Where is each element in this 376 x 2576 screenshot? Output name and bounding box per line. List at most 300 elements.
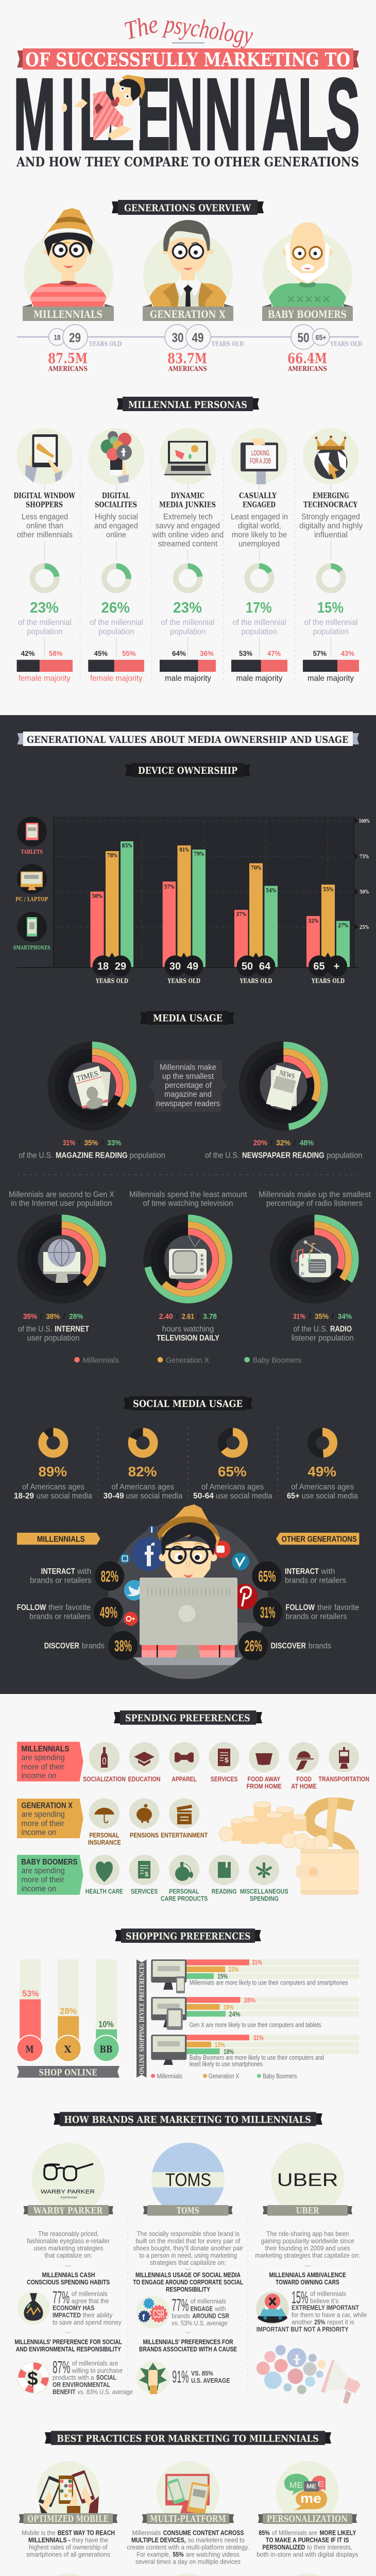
uber stat: car ownership: 25%	[314, 2318, 326, 2326]
icon: radio with notes	[296, 1241, 331, 1277]
television stat: 2.40	[159, 1313, 173, 1321]
persona titles: MEDIA JUNKIES	[159, 501, 216, 509]
baby boomer spending icons	[89, 1855, 279, 1885]
magazine stat: 35%	[84, 1139, 98, 1147]
chart: device ownership bars: 32%	[308, 918, 318, 924]
tag: millennials: MILLENNIALS	[37, 1535, 85, 1544]
magazine stat: /	[78, 1139, 80, 1147]
shop online ribbon: SHOP ONLINE	[39, 2067, 97, 2078]
population captions: population	[98, 628, 134, 636]
brand name ribbons: UBER	[296, 2206, 319, 2216]
heading ribbon: GENERATIONS OVERVIEW	[124, 202, 251, 214]
uber stat: car ownership: 15%	[292, 2288, 308, 2307]
tag: other generations	[276, 1533, 360, 1545]
section: millennial personas	[13, 397, 363, 683]
icon: takeout box	[255, 1753, 272, 1765]
newspaper stat: /	[294, 1139, 296, 1147]
icon: csr gears: f	[142, 2313, 145, 2322]
icon: blog speech bubble	[276, 2573, 339, 2576]
uber stat: car ownership: report it is	[327, 2318, 354, 2326]
section: how brands are marketing	[14, 2112, 367, 2404]
magazine stat: population	[129, 1151, 165, 1160]
social media percentages: 49%	[307, 1464, 336, 1480]
text: optimized mobile: highest rates of ownership of	[29, 2544, 108, 2551]
television stat: /	[176, 1313, 178, 1321]
uber stat: car ownership	[256, 2288, 367, 2333]
legend icon: tablets: TABLETS	[21, 849, 43, 855]
heading ribbon: SPENDING PREFERENCES	[125, 1713, 250, 1724]
warby parker stat: responsibility: of millennials are	[72, 2360, 118, 2367]
generation x spending labels: INSURANCE	[88, 1838, 121, 1846]
chart: shop online columns: 28%	[60, 2006, 77, 2016]
text: multi platform: several times a day on multiple devices	[135, 2558, 241, 2566]
device preference group: baby boomers: 31%	[253, 2034, 264, 2042]
age badges: +	[334, 961, 339, 972]
persona titles: CASUALLY	[239, 492, 277, 500]
chart: device ownership bars: 57%	[164, 884, 175, 890]
persona share donuts	[32, 566, 343, 590]
device preference legend: Generation X	[209, 2073, 240, 2080]
newspaper stat: NEWSPAPAER READING	[242, 1151, 324, 1160]
callout: smallest percentage: newspaper readers	[156, 1099, 220, 1108]
gender split bars: 42%	[21, 649, 35, 657]
millennial brand statements: their favorite	[48, 1603, 91, 1612]
icon: laptop with media	[160, 428, 216, 484]
chart: shop online columns: BB	[100, 2044, 112, 2055]
social media percentages	[38, 1464, 336, 1480]
vertical ribbon: online shopping device preferences: ONLINE SHOPPING DEVICE PREFERENCES	[138, 1963, 145, 2074]
heading ribbon	[114, 1710, 262, 1725]
chart: shop online columns: M	[26, 2044, 34, 2055]
heading ribbon: HOW BRANDS ARE MARKETING TO MILLENNIALS	[64, 2114, 311, 2126]
brand intros: that capitalize on:	[45, 2251, 92, 2259]
age timeline: 49	[192, 331, 204, 345]
section: best practices	[19, 2431, 358, 2576]
population captions: of the millennial	[233, 618, 286, 627]
warby parker stat: economy: of millennials	[72, 2290, 108, 2298]
magazine stat: MAGAZINE READING	[56, 1151, 128, 1160]
icon: book	[218, 1862, 231, 1878]
baby boomer spending labels: MISCELLANEOUS	[240, 1888, 288, 1895]
chart: device ownership bars: 54%	[266, 887, 276, 894]
baby boomer spending labels	[86, 1888, 288, 1903]
gender split bars: male majority	[165, 674, 211, 683]
social media captions: use social media	[216, 1492, 272, 1500]
tag: millennials spending: MILLENNIALS	[21, 1744, 70, 1753]
brand subheadings	[14, 2271, 346, 2353]
age timeline	[17, 325, 362, 349]
chart: device ownership bars	[17, 817, 370, 985]
best practice ribbons row one	[19, 2513, 357, 2524]
icon: television	[169, 1235, 207, 1279]
millennial spending labels	[83, 1775, 369, 1790]
text: multi platform: 55%	[173, 2551, 184, 2558]
other generations brand statements	[271, 1567, 360, 1650]
device preference group: millennials: 23%	[229, 1965, 239, 1973]
persona descriptions: Strongly engaged	[301, 513, 360, 521]
title script: The psychology: psychology	[162, 9, 255, 50]
icon: csr gears	[136, 2296, 169, 2329]
text: multi platform: MULTIPLE DEVICES,	[131, 2536, 186, 2544]
tag: generation x spending: are spending	[21, 1810, 65, 1819]
icon: money bag	[17, 2292, 50, 2325]
icon: heart	[96, 1861, 113, 1882]
uber stat: car ownership: IMPORTANT BUT NOT A PRIORITY	[257, 2326, 349, 2333]
gender split bars: male majority	[307, 674, 354, 683]
millennial brand statements: brands or retailers	[29, 1613, 91, 1621]
brand interaction badges: 82%	[101, 1567, 118, 1585]
brand intros	[27, 2230, 360, 2266]
subheading ribbon: device ownership	[125, 763, 250, 777]
device preference legend: Millennials	[157, 2073, 182, 2080]
warby parker stat: responsibility: willing to purchase	[72, 2367, 123, 2375]
chart: device ownership bars: 37%	[236, 911, 246, 918]
internet stat: /	[63, 1313, 65, 1321]
media usage legend: Baby Boomers	[253, 1356, 301, 1365]
portrait: generation x	[143, 220, 233, 320]
legend icon: pc laptop: PC / LAPTOP	[15, 896, 48, 903]
persona descriptions: savvy and engaged	[156, 521, 220, 531]
social media captions	[14, 1483, 358, 1500]
brand card: warby parker logo: WARBY PARKER	[41, 2189, 95, 2195]
chart: device ownership bars: 85%	[122, 842, 132, 849]
icon: raised fist	[136, 2361, 169, 2394]
brand interaction badges: 49%	[100, 1603, 117, 1621]
text: optimized mobile: they have the	[72, 2536, 108, 2544]
text: multi platform: are watching videos	[186, 2551, 240, 2558]
population captions: of the millennial	[304, 618, 357, 627]
warby parker stat: responsibility: 87%	[53, 2358, 70, 2377]
brand intros: The reasonably priced,	[38, 2230, 99, 2238]
warby parker stat: economy: ECONOMY HAS	[53, 2304, 95, 2312]
device preference group: generation x	[151, 1996, 359, 2030]
brand subheadings: TO ENGAGE AROUND CORPORATE SOCIAL	[133, 2278, 243, 2286]
population captions: of the millennial	[18, 618, 72, 627]
age timeline: 18	[54, 333, 61, 342]
brand intros: to a person in need, using marketing	[139, 2251, 237, 2259]
gender split bars: 43%	[341, 649, 355, 657]
brand intros: fashionable eyeglass e-retailer	[27, 2237, 110, 2245]
millennial spending labels: SERVICES	[211, 1775, 238, 1783]
age timeline: YEARS OLD	[89, 340, 122, 347]
persona titles: TECHNOCRACY	[303, 501, 358, 509]
television stat: 2.61	[182, 1313, 194, 1321]
text: personalization: 85%	[259, 2529, 270, 2537]
persona descriptions: influential	[314, 531, 348, 539]
text: multi platform	[127, 2529, 249, 2566]
illustration: millennial at laptop with social icons	[106, 1504, 270, 1681]
brand interaction badges: 31%	[260, 1603, 275, 1621]
text: optimized mobile: smartphones of all generations	[26, 2551, 111, 2558]
radio stat: 34%	[338, 1313, 352, 1321]
radial chart: newspaper readers	[239, 1042, 328, 1130]
newspaper stat	[205, 1139, 363, 1160]
persona percentages: 26%	[101, 600, 130, 616]
device preference legend: Baby Boomers	[263, 2073, 297, 2080]
magazine stat: 31%	[63, 1139, 75, 1147]
chart: device ownership bars: 75%	[360, 854, 369, 860]
warby parker stat: economy: IMPACTED	[53, 2311, 81, 2319]
text: personalization: PERSONALIZED	[262, 2544, 305, 2551]
brand card: toms logo: TOMS	[165, 2170, 211, 2190]
newspaper stat: of the U.S.	[205, 1151, 240, 1160]
heading ribbon	[115, 1928, 261, 1943]
warby parker stat: economy: to save and spend money	[53, 2318, 122, 2326]
gender split bars: 47%	[267, 649, 281, 657]
tag: millennials spending	[17, 1742, 83, 1782]
icon: life ring with dollar	[17, 2361, 50, 2394]
social media captions: 18-29	[14, 1492, 34, 1500]
gender split bars: female majority	[90, 674, 143, 683]
brand interaction badges: 38%	[114, 1637, 132, 1655]
tag: millennials spending: more of their	[21, 1762, 64, 1771]
text: personalization: MORE LIKELY	[320, 2529, 356, 2537]
icon: multi platform devices	[157, 2461, 219, 2524]
millennial brand statements: INTERACT	[41, 1567, 75, 1576]
persona titles: SOCIALITES	[95, 501, 137, 509]
icon: personalization speech bubbles: E	[317, 2480, 324, 2488]
magazine stat	[19, 1139, 165, 1160]
media usage legend	[74, 1356, 301, 1365]
age badges: 29	[115, 961, 126, 972]
other generations brand statements: with	[320, 1567, 335, 1576]
text: personalization	[257, 2529, 358, 2558]
millennial brand statements: FOLLOW	[17, 1603, 46, 1612]
generation x spending icons	[89, 1798, 199, 1828]
text: multi platform: For example,	[136, 2551, 170, 2558]
radio stat: RADIO	[330, 1325, 352, 1333]
internet stat: 35%	[23, 1313, 37, 1321]
brand card: toms logo	[151, 2143, 225, 2216]
population captions: population	[170, 628, 206, 636]
brand subheadings: BRANDS ASSOCIATED WITH A CAUSE	[139, 2345, 237, 2353]
icon: receipt	[218, 1749, 230, 1766]
chart: shop online columns: X	[64, 2044, 72, 2055]
tag: other generations: OTHER GENERATIONS	[282, 1535, 357, 1544]
age badges: 18	[97, 961, 109, 972]
age badges: 65	[313, 961, 325, 972]
uber stat: car ownership: EXTREMELY IMPORTANT	[292, 2304, 359, 2312]
toms stat: csr: vs. 53% U.S. average	[172, 2319, 228, 2327]
baby boomer spending icons: $	[145, 1870, 149, 1878]
newspaper stat: 32%	[276, 1139, 290, 1147]
heading ribbon: SHOPPING PREFERENCES	[126, 1931, 250, 1942]
shop online ribbon	[17, 2066, 119, 2078]
persona titles: DIGITAL WINDOW	[13, 492, 76, 500]
warby parker stat: responsibility: BENEFIT	[53, 2388, 76, 2396]
warby parker stat: responsibility: SOCIAL	[96, 2374, 116, 2381]
social media percentages: 82%	[128, 1464, 157, 1480]
persona titles: ENGAGED	[243, 501, 276, 509]
device preference group: generation x: 28%	[244, 1996, 255, 2004]
gender split bars: female majority	[19, 674, 71, 683]
generation x spending labels: PENSIONS	[130, 1831, 159, 1839]
icon: personalization speech bubbles: ME	[306, 2483, 316, 2490]
toms stat: csr: brands	[172, 2312, 190, 2319]
internet stat: INTERNET	[55, 1325, 89, 1333]
icon: monitor with tablet	[151, 1997, 186, 2030]
newspaper stat: /	[270, 1139, 272, 1147]
other generations brand statements: brands or retailers	[285, 1576, 346, 1585]
social media donuts	[42, 1432, 333, 1454]
other generations brand statements: brands	[309, 1641, 331, 1650]
icon: piggy bank	[136, 1808, 152, 1821]
other generations brand statements: DISCOVER	[271, 1641, 306, 1650]
population captions: of the millennial	[90, 618, 143, 627]
toms stat: csr: 77%	[172, 2296, 189, 2315]
chart: device ownership bars: 50%	[360, 890, 369, 895]
icon: csr gears: CSR	[153, 2308, 164, 2320]
heading ribbon: BEST PRACTICES FOR MARKETING TO MILLENNIALS	[57, 2433, 319, 2444]
internet stat: /	[40, 1313, 42, 1321]
tag: baby boomers spending: BABY BOOMERS	[21, 1858, 77, 1867]
warby parker stat: economy: agree that the	[72, 2297, 109, 2305]
icon: looking for a job sign: FOR A JOB	[250, 456, 271, 465]
baby boomer spending labels: SPENDING	[250, 1895, 279, 1903]
icon: personalization speech bubbles: me	[300, 2490, 321, 2506]
persona titles	[13, 492, 358, 509]
other generations brand statements: brands or retailers	[285, 1613, 347, 1621]
tag: baby boomers spending: are spending	[21, 1867, 65, 1875]
persona percentages: 23%	[30, 600, 59, 616]
chart: device ownership bars: 25%	[360, 925, 369, 930]
icon: globe on monitor	[43, 1239, 80, 1283]
legend icon: pc laptop	[15, 864, 48, 903]
persona descriptions: Highly social	[95, 513, 138, 521]
callout: smallest percentage: magazine and	[164, 1090, 212, 1099]
subheading ribbon: device ownership: DEVICE OWNERSHIP	[138, 765, 237, 776]
brand subheadings: MILLENNIALS AMBIVALENCE	[269, 2271, 346, 2279]
age timeline: YEARS OLD	[211, 340, 244, 347]
television stat: 3.78	[203, 1313, 217, 1321]
age timeline: 30	[172, 331, 183, 345]
magazine stat: 33%	[107, 1139, 122, 1147]
brand interaction badges	[94, 1561, 282, 1660]
portrait: baby boomer	[262, 222, 353, 307]
device preference group: millennials: Millennials are more likely to use their computers and smartphones	[190, 1979, 348, 1987]
warby parker stat: responsibility	[17, 2358, 133, 2396]
best practice ribbons row one: PERSONALIZATION	[267, 2514, 348, 2524]
callout: smallest percentage: percentage of	[165, 1081, 212, 1090]
text: optimized mobile: MILLENNIALS -	[28, 2536, 70, 2544]
millennial spending labels: AT HOME	[291, 1783, 317, 1790]
social media captions: 65+	[287, 1492, 300, 1500]
social media captions: of Americans ages	[111, 1483, 174, 1492]
icon: looking for a job sign	[231, 428, 287, 484]
persona descriptions: digitally and highly	[299, 521, 363, 531]
radial chart: internet users	[17, 1214, 106, 1303]
text: personalization: both in-store and with digital displays	[257, 2551, 358, 2558]
three column intro text: Millennials spend the least amount	[129, 1190, 247, 1199]
icon: newspaper	[266, 1065, 301, 1110]
millennial spending icons: $	[225, 1756, 229, 1764]
brand intros: gaining popularity worldwide since	[261, 2237, 354, 2245]
brand intros: The socially responsible shoe brand is	[136, 2230, 240, 2238]
age badges: YEARS OLD	[240, 977, 272, 985]
brand interaction badges: 26%	[245, 1637, 262, 1655]
persona descriptions: streamed content	[158, 540, 218, 548]
text: personalization: of Millennials are	[272, 2529, 317, 2537]
tag: millennials	[17, 1533, 100, 1545]
subheading ribbon: media usage: MEDIA USAGE	[153, 1013, 223, 1024]
text: multi platform: Millennials	[132, 2529, 161, 2537]
brand name ribbons: TOMS	[177, 2206, 199, 2216]
three column intro text: in the Internet user population	[11, 1199, 112, 1208]
internet stat: 28%	[69, 1313, 83, 1321]
social media percentages: 65%	[218, 1464, 247, 1480]
radial chart: magazine readers	[47, 1042, 136, 1130]
television stat: /	[197, 1313, 199, 1321]
text: optimized mobile	[22, 2529, 115, 2558]
brand card: uber logo	[271, 2143, 344, 2216]
icon: crown on globe with cursor	[303, 428, 359, 484]
persona percentages	[30, 600, 344, 616]
legend icon: smartphones: SMARTPHONES	[13, 944, 50, 951]
icon: asterisk	[255, 1862, 272, 1878]
persona percentages: 17%	[246, 600, 272, 616]
brand intros: The ride-sharing app has been	[266, 2230, 349, 2238]
millennial brand statements: DISCOVER	[44, 1641, 79, 1650]
persona percentages: 15%	[317, 600, 344, 616]
title script: The psychology	[121, 9, 255, 50]
brand name ribbons: WARBY PARKER	[33, 2206, 103, 2216]
internet stat: 38%	[46, 1313, 60, 1321]
population captions: of the millennial	[161, 618, 214, 627]
tag: baby boomers spending	[17, 1855, 83, 1895]
tag: baby boomers spending: more of their	[21, 1875, 64, 1884]
population figures: 66.4M	[287, 351, 327, 367]
dark panel: generational values	[0, 715, 376, 1694]
icon: car with cross	[256, 2292, 289, 2325]
persona descriptions	[17, 513, 363, 548]
uber stat: car ownership: of millennials	[310, 2290, 346, 2297]
brand intros: their founding in 2009 and uses	[265, 2244, 350, 2252]
age timeline: 65+	[315, 333, 327, 342]
gender split bars: 53%	[239, 649, 253, 657]
icon: social network bubbles	[88, 428, 144, 484]
icon: perfume bottle	[175, 1867, 190, 1881]
icon: tablet and shoe	[16, 428, 73, 484]
persona descriptions: other millennials	[17, 531, 73, 539]
millennial spending labels: EDUCATION	[128, 1775, 161, 1783]
persona descriptions: online than	[26, 521, 63, 531]
millennial brand statements: brands or retailers	[30, 1576, 92, 1585]
text: multi platform: CONSUME CONTENT ACROSS	[163, 2529, 244, 2537]
device preference group: baby boomers: 13%	[215, 2041, 225, 2048]
millennial spending labels: FOOD	[297, 1775, 312, 1783]
magazine stat: /	[101, 1139, 104, 1147]
persona descriptions: Extremely tech	[163, 513, 213, 521]
warby parker stat: economy: 77%	[53, 2288, 70, 2307]
callout: smallest percentage: up the smallest	[162, 1072, 214, 1081]
brand intros: uses marketing strategies	[33, 2244, 104, 2252]
baby boomer spending labels: SERVICES	[131, 1888, 158, 1895]
age badges: YEARS OLD	[311, 977, 345, 985]
brand subheadings: MILLENNIALS' PREFERENCE FOR SOCIAL	[14, 2338, 122, 2346]
brand subheadings: MILLENNIALS CASH	[42, 2271, 95, 2279]
chart: shop online columns	[17, 1959, 119, 2078]
age timeline: 50	[298, 331, 309, 345]
warby parker stat: responsibility: vs. 83% U.S. average	[77, 2388, 133, 2396]
radial chart: television hours	[143, 1214, 233, 1303]
television stat	[157, 1313, 220, 1343]
brand subheadings: MILLENNIALS' PREFERENCES FOR	[143, 2338, 233, 2346]
generation labels	[23, 307, 353, 321]
toms stat: cause	[136, 2361, 230, 2394]
persona descriptions: and engaged	[94, 521, 138, 531]
brand subheadings: TOWARD OWNING CARS	[276, 2278, 339, 2286]
icon: personalization speech bubbles	[276, 2461, 339, 2524]
